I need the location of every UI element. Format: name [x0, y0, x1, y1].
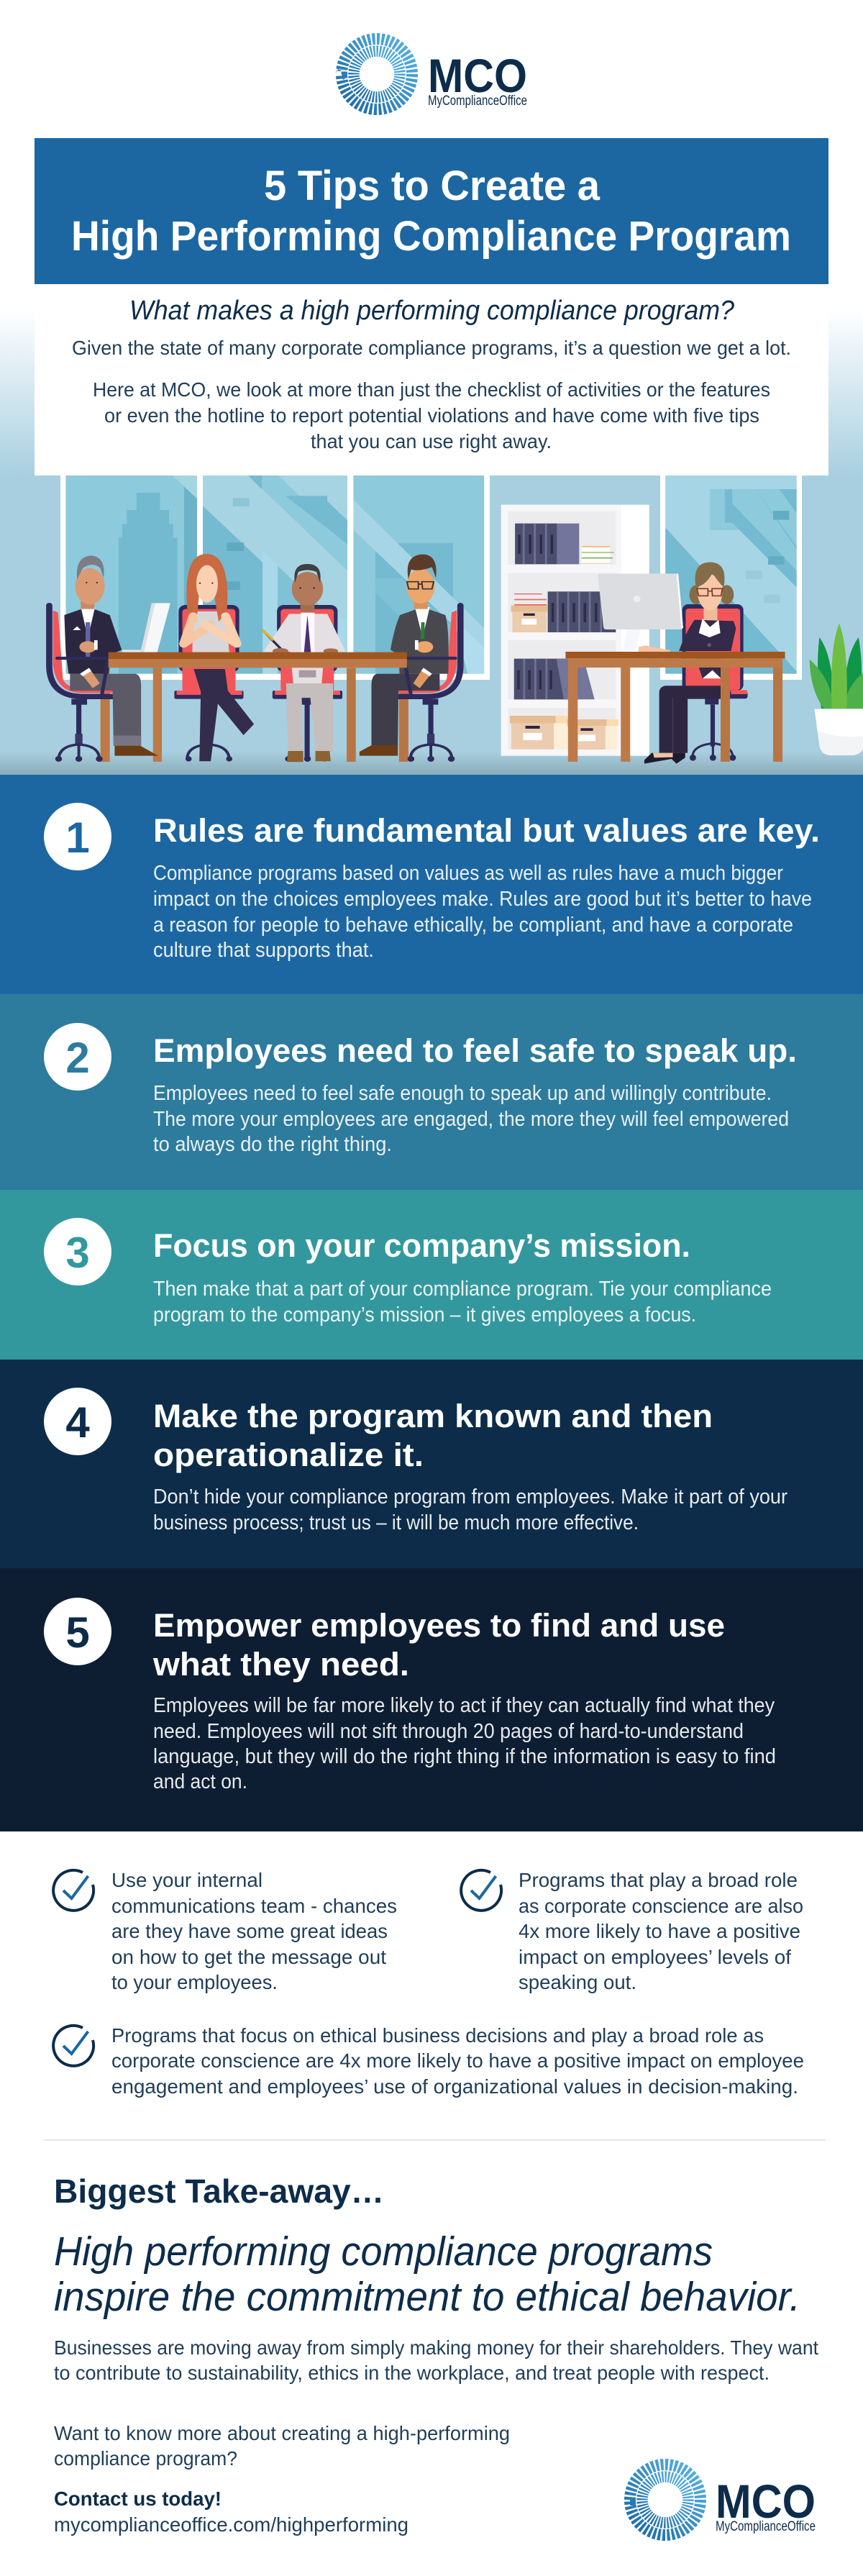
text: communications team - chances: [111, 1895, 397, 1917]
takeaway statement: [54, 2229, 800, 2320]
logo: MCO footer: [630, 2465, 816, 2535]
body 5: language, but they will do the right thing if the information is easy to find: [153, 1745, 776, 1768]
body 5: and act on.: [153, 1770, 247, 1793]
heading 4: [153, 1398, 713, 1473]
body 1: [153, 862, 812, 962]
body 2: Employees need to feel safe enough to speak up and willingly contribute.: [153, 1082, 772, 1105]
text: are they have some great ideas: [111, 1920, 388, 1942]
badge 1: 1: [65, 814, 90, 862]
text: as corporate conscience are also: [519, 1895, 803, 1917]
badge 1: [44, 803, 111, 870]
intro paragraph: [93, 378, 770, 452]
intro paragraph: that you can use right away.: [311, 430, 552, 452]
desk: [565, 652, 785, 762]
heading 5: Empower employees to find and use: [153, 1607, 725, 1644]
body 3: Then make that a part of your compliance program. Tie your compliance: [153, 1278, 772, 1301]
heading 1: Rules are fundamental but values are key.: [153, 812, 820, 849]
icon: check: [461, 1870, 501, 1911]
takeaway paragraph: to contribute to sustainability, ethics in the workplace, and treat people with respect.: [54, 2362, 770, 2384]
table top: [109, 652, 407, 668]
contact: [54, 2488, 408, 2536]
logo: MCO footer: MyComplianceOffice: [716, 2519, 816, 2534]
body 4: Don’t hide your compliance program from employees. Make it part of your: [153, 1485, 787, 1508]
logo: MCO header: [342, 39, 527, 109]
person: man with glasses: [360, 555, 460, 762]
title banner: [35, 138, 828, 284]
body 2: [153, 1082, 789, 1156]
body 3: program to the company’s mission – it gives employees a focus.: [153, 1303, 696, 1326]
heading 2: Employees need to feel safe to speak up.: [153, 1032, 797, 1069]
plant: [810, 624, 863, 755]
badge 3: 3: [65, 1229, 90, 1277]
takeaway statement: inspire the commitment to ethical behavior.: [54, 2274, 800, 2320]
panel: tip 4: [0, 1360, 863, 1568]
person: woman with red hair: [174, 554, 254, 762]
illustration: office scene: [0, 475, 863, 775]
heading 4: Make the program known and then: [153, 1398, 713, 1434]
body 5: need. Employees will not sift through 20 pages of hard-to-understand: [153, 1720, 744, 1743]
takeaway paragraph: [54, 2336, 818, 2384]
text: [519, 1869, 803, 1993]
intro paragraph: or even the hotline to report potential violations and have come with five tips: [104, 404, 759, 427]
computer monitor: [598, 573, 683, 652]
checklist item 2: [461, 1869, 803, 1993]
person: woman at desk: [644, 563, 748, 764]
call to action: compliance program?: [54, 2447, 237, 2470]
body 4: [153, 1485, 787, 1534]
person: man in white shirt: [262, 564, 346, 762]
body 3: [153, 1278, 772, 1326]
windows: [60, 475, 802, 680]
body 5: Employees will be far more likely to act if they can actually find what they: [153, 1694, 775, 1717]
panel: tip 5: [0, 1568, 863, 1831]
body 2: The more your employees are engaged, the more they will feel empowered: [153, 1108, 789, 1131]
text: speaking out.: [519, 1971, 636, 1993]
background gradient: [0, 0, 863, 777]
takeaway statement: High performing compliance programs: [54, 2229, 713, 2275]
title banner: 5 Tips to Create a: [264, 163, 601, 209]
person: man in navy suit: [49, 555, 158, 762]
badge 4: 4: [65, 1398, 90, 1447]
floor shadow: [0, 752, 863, 775]
badge 5: [44, 1598, 111, 1665]
text: engagement and employees’ use of organizational values in decision-making.: [111, 2075, 798, 2098]
text: to your employees.: [111, 1971, 278, 1993]
bookshelf: [501, 505, 649, 756]
intro paragraph: Here at MCO, we look at more than just the checklist of activities or the features: [93, 378, 770, 401]
text: [111, 2024, 804, 2098]
text: Use your internal: [111, 1869, 262, 1891]
body 1: culture that supports that.: [153, 939, 374, 962]
heading: biggest take-away: Biggest Take-away…: [54, 2172, 384, 2210]
call to action: [54, 2422, 510, 2470]
badge 2: 2: [65, 1034, 90, 1082]
logo: MCO header: MCO: [428, 49, 527, 102]
logo: MCO header: MyComplianceOffice: [428, 94, 527, 109]
text: Programs that focus on ethical business decisions and play a broad role as: [111, 2024, 764, 2047]
heading 5: what they need.: [152, 1646, 409, 1683]
panel: tip 3: [0, 1190, 863, 1360]
body 5: [153, 1694, 776, 1793]
intro question: What makes a high performing compliance program?: [129, 296, 735, 326]
body 4: business process; trust us – it will be much more effective.: [153, 1511, 639, 1534]
icon: check: [53, 2026, 93, 2066]
body 1: impact on the choices employees make. Rules are good but it’s better to have: [153, 888, 812, 911]
heading 3: Focus on your company’s mission.: [153, 1227, 690, 1264]
laptop: [122, 603, 170, 652]
heading 5: [152, 1607, 725, 1683]
icon: check: [53, 1870, 93, 1911]
heading 4: operationalize it.: [153, 1437, 424, 1473]
text: impact on employees’ levels of: [519, 1946, 791, 1968]
logo: MCO footer: MCO: [716, 2475, 816, 2528]
call to action: Want to know more about creating a high-performing: [54, 2422, 510, 2444]
body 1: Compliance programs based on values as well as rules have a much bigger: [153, 862, 783, 885]
text: Programs that play a broad role: [519, 1869, 798, 1891]
body 1: a reason for people to behave ethically, be compliant, and have a corporate: [153, 914, 793, 937]
body 2: to always do the right thing.: [153, 1133, 392, 1156]
badge 2: [44, 1023, 111, 1091]
table: meeting: [101, 668, 408, 762]
badge 5: 5: [65, 1608, 90, 1657]
checklist item 1: [53, 1869, 397, 1993]
badge 4: [44, 1388, 111, 1455]
checklist item 3: [53, 2024, 804, 2098]
contact: Contact us today!: [54, 2488, 222, 2510]
panel: tip 2: [0, 994, 863, 1190]
contact: mycomplianceoffice.com/highperforming: [54, 2513, 408, 2536]
text: on how to get the message out: [111, 1946, 386, 1968]
panel: tip 1: [0, 775, 863, 994]
badge 3: [44, 1218, 111, 1285]
takeaway paragraph: Businesses are moving away from simply making money for their shareholders. They want: [54, 2336, 818, 2359]
panel: intro text: [35, 284, 828, 475]
text: 4x more likely to have a positive: [519, 1920, 800, 1942]
title banner: High Performing Compliance Program: [71, 213, 791, 260]
text: [111, 1869, 397, 1993]
intro line: Given the state of many corporate compliance programs, it’s a question we get a lot.: [72, 337, 791, 359]
text: corporate conscience are 4x more likely to have a positive impact on employee: [111, 2049, 804, 2072]
